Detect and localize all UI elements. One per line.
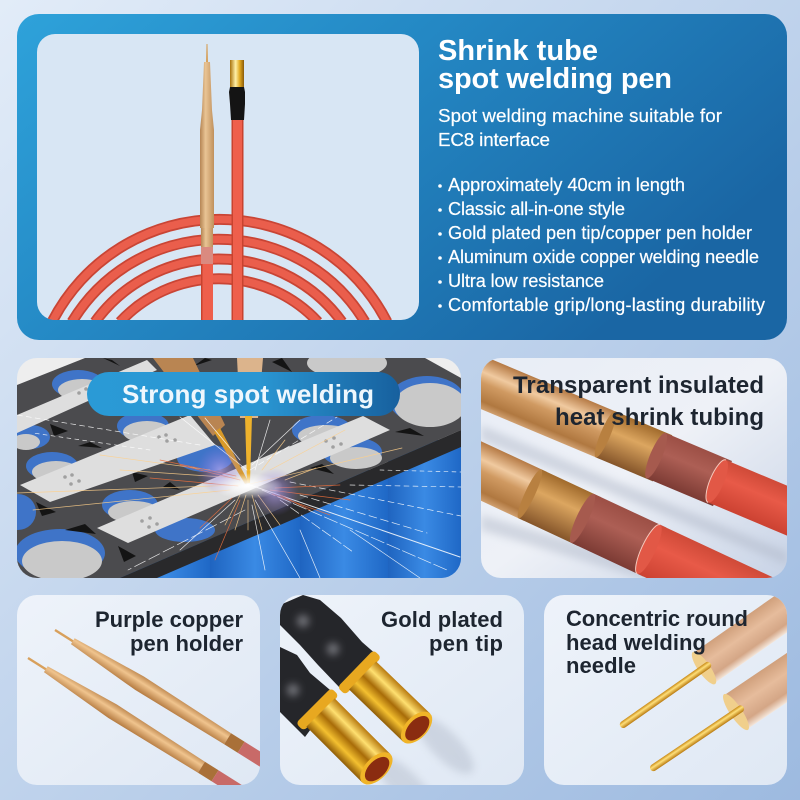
heading	[566, 606, 748, 678]
feature list: Comfortable grip/long-lasting durability	[448, 295, 766, 315]
pen upper	[54, 629, 260, 767]
callout: strong spot welding: Strong spot welding	[122, 379, 374, 409]
feature list: Approximately 40cm in length	[448, 175, 685, 195]
gold connector right	[339, 652, 432, 744]
lower tube	[481, 441, 773, 578]
subtitle: EC8 interface	[438, 129, 550, 150]
battery holder plate	[17, 358, 461, 578]
title	[438, 35, 672, 95]
needle upper	[620, 596, 787, 728]
panel: gold plated pen tip	[280, 595, 524, 800]
feature list: Ultra low resistance	[448, 271, 604, 291]
heading: Concentric round	[566, 606, 748, 631]
heading: pen tip	[429, 631, 503, 656]
welding electrodes	[153, 358, 263, 484]
panel: heat shrink tubing	[481, 358, 787, 578]
connector shadows	[381, 718, 474, 785]
subtitle: Spot welding machine suitable for	[438, 105, 722, 126]
feature list: Aluminum oxide copper welding needle	[448, 247, 759, 267]
panel: strong spot welding photo	[17, 358, 461, 578]
tube shadows	[481, 425, 787, 578]
welding glow	[196, 446, 299, 516]
panel: concentric round head welding needle	[544, 595, 787, 785]
needle lower	[650, 653, 787, 772]
heading	[381, 607, 503, 656]
sparks	[17, 415, 461, 578]
battery cells	[120, 440, 461, 578]
heading: head welding	[566, 630, 706, 655]
subtitle	[438, 105, 722, 150]
feature list	[438, 175, 766, 315]
panel: product overview	[17, 14, 787, 340]
heading: heat shrink tubing	[555, 404, 764, 431]
pen lower	[27, 657, 242, 785]
black sleeve tubes	[280, 595, 378, 737]
nickel strips	[17, 360, 390, 543]
heading: needle	[566, 653, 636, 678]
title: Shrink tube	[438, 35, 598, 67]
callout: strong spot welding	[87, 372, 400, 416]
heading	[513, 372, 764, 431]
heading: Purple copper	[95, 607, 243, 632]
gold connector left	[297, 690, 393, 784]
title: spot welding pen	[438, 63, 672, 95]
heading: Transparent insulated	[513, 372, 764, 399]
upper tube	[481, 360, 787, 536]
heading: Gold plated	[381, 607, 503, 632]
feature list: Gold plated pen tip/copper pen holder	[448, 223, 752, 243]
heading: pen holder	[130, 631, 243, 656]
panel: purple copper pen holder	[17, 595, 260, 785]
product photo: coiled welding pen	[37, 34, 419, 322]
feature list: Classic all-in-one style	[448, 199, 625, 219]
heading	[95, 607, 243, 656]
